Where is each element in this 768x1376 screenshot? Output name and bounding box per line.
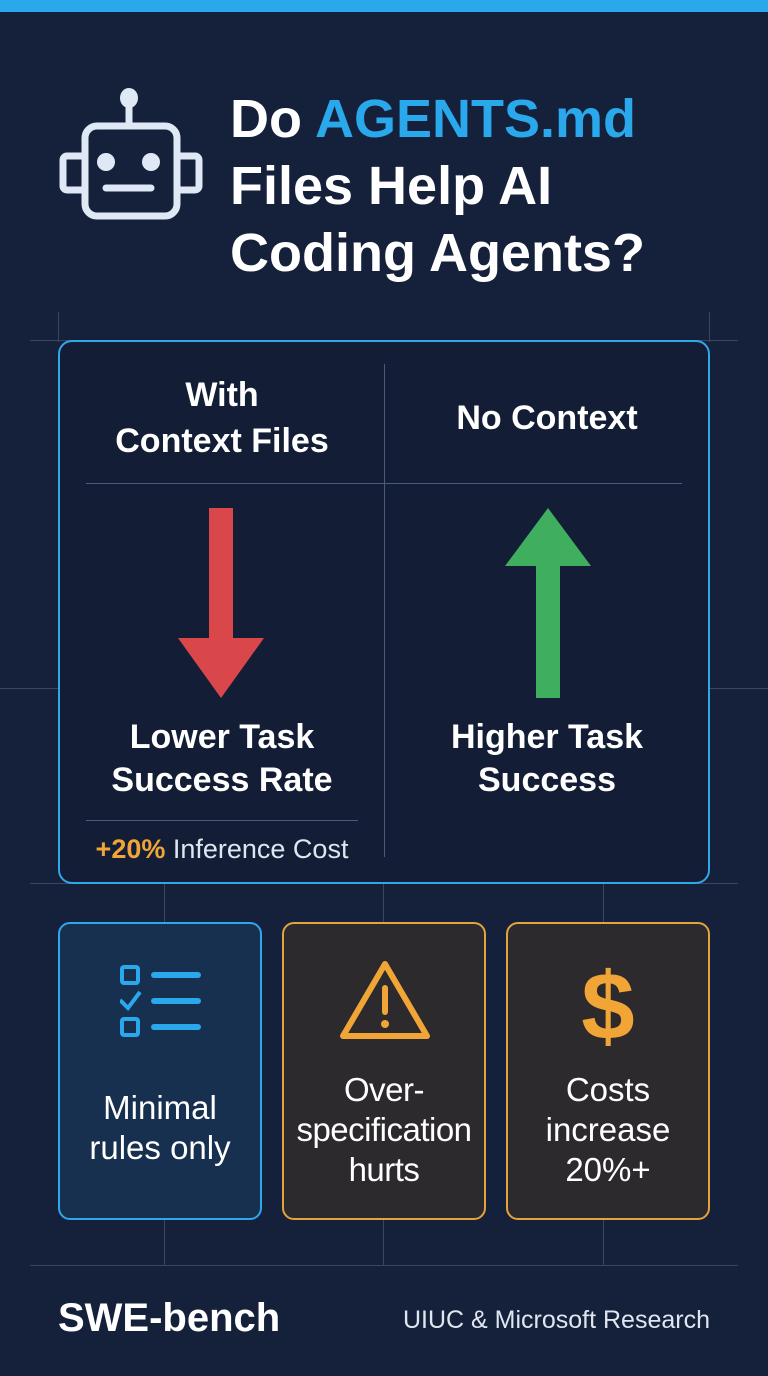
text: higher task success: Success — [478, 761, 616, 799]
heading: with context files — [115, 376, 329, 460]
card: over-specification: hurts — [349, 1151, 419, 1188]
title: Files Help AI — [230, 156, 552, 216]
title: Coding Agents? — [230, 223, 645, 283]
card: over-specification: Over- — [344, 1071, 424, 1108]
arrow: down red — [178, 508, 264, 698]
heading: with context files: Context Files — [115, 422, 329, 460]
card: costs increase — [506, 922, 710, 1220]
text: inference cost: +20% Inference Cost — [96, 834, 348, 864]
card: minimal rules: rules only — [89, 1129, 231, 1166]
heading: with context files: With — [185, 376, 259, 414]
icon: warning — [340, 961, 430, 1039]
card: minimal rules — [58, 922, 262, 1220]
text: lower task success rate: Success Rate — [111, 761, 333, 799]
card: minimal rules: Minimal — [103, 1089, 217, 1126]
card: over-specification: specification — [296, 1111, 472, 1148]
top accent bar — [0, 0, 768, 12]
card: costs increase: Costs — [566, 1071, 650, 1108]
text: lower task success rate: Lower Task — [130, 718, 314, 756]
text: lower task success rate — [111, 718, 333, 799]
title: Do AGENTS.md — [230, 89, 636, 149]
panel: comparison — [58, 340, 710, 884]
icon: robot — [60, 88, 202, 220]
arrow: up green — [505, 508, 591, 698]
heading: no context: No Context — [456, 399, 638, 437]
card: costs increase: 20%+ — [565, 1151, 651, 1188]
footer: SWE-bench: SWE-bench — [58, 1296, 280, 1340]
card: costs increase: increase — [546, 1111, 670, 1148]
text: higher task success — [451, 718, 643, 799]
footer: credits: UIUC & Microsoft Research — [403, 1306, 710, 1334]
card: over-specification — [282, 922, 486, 1220]
text: higher task success: Higher Task — [451, 718, 643, 756]
icon: dollar: $ — [581, 953, 635, 1060]
title — [230, 89, 645, 283]
icon: checklist — [120, 965, 201, 1037]
